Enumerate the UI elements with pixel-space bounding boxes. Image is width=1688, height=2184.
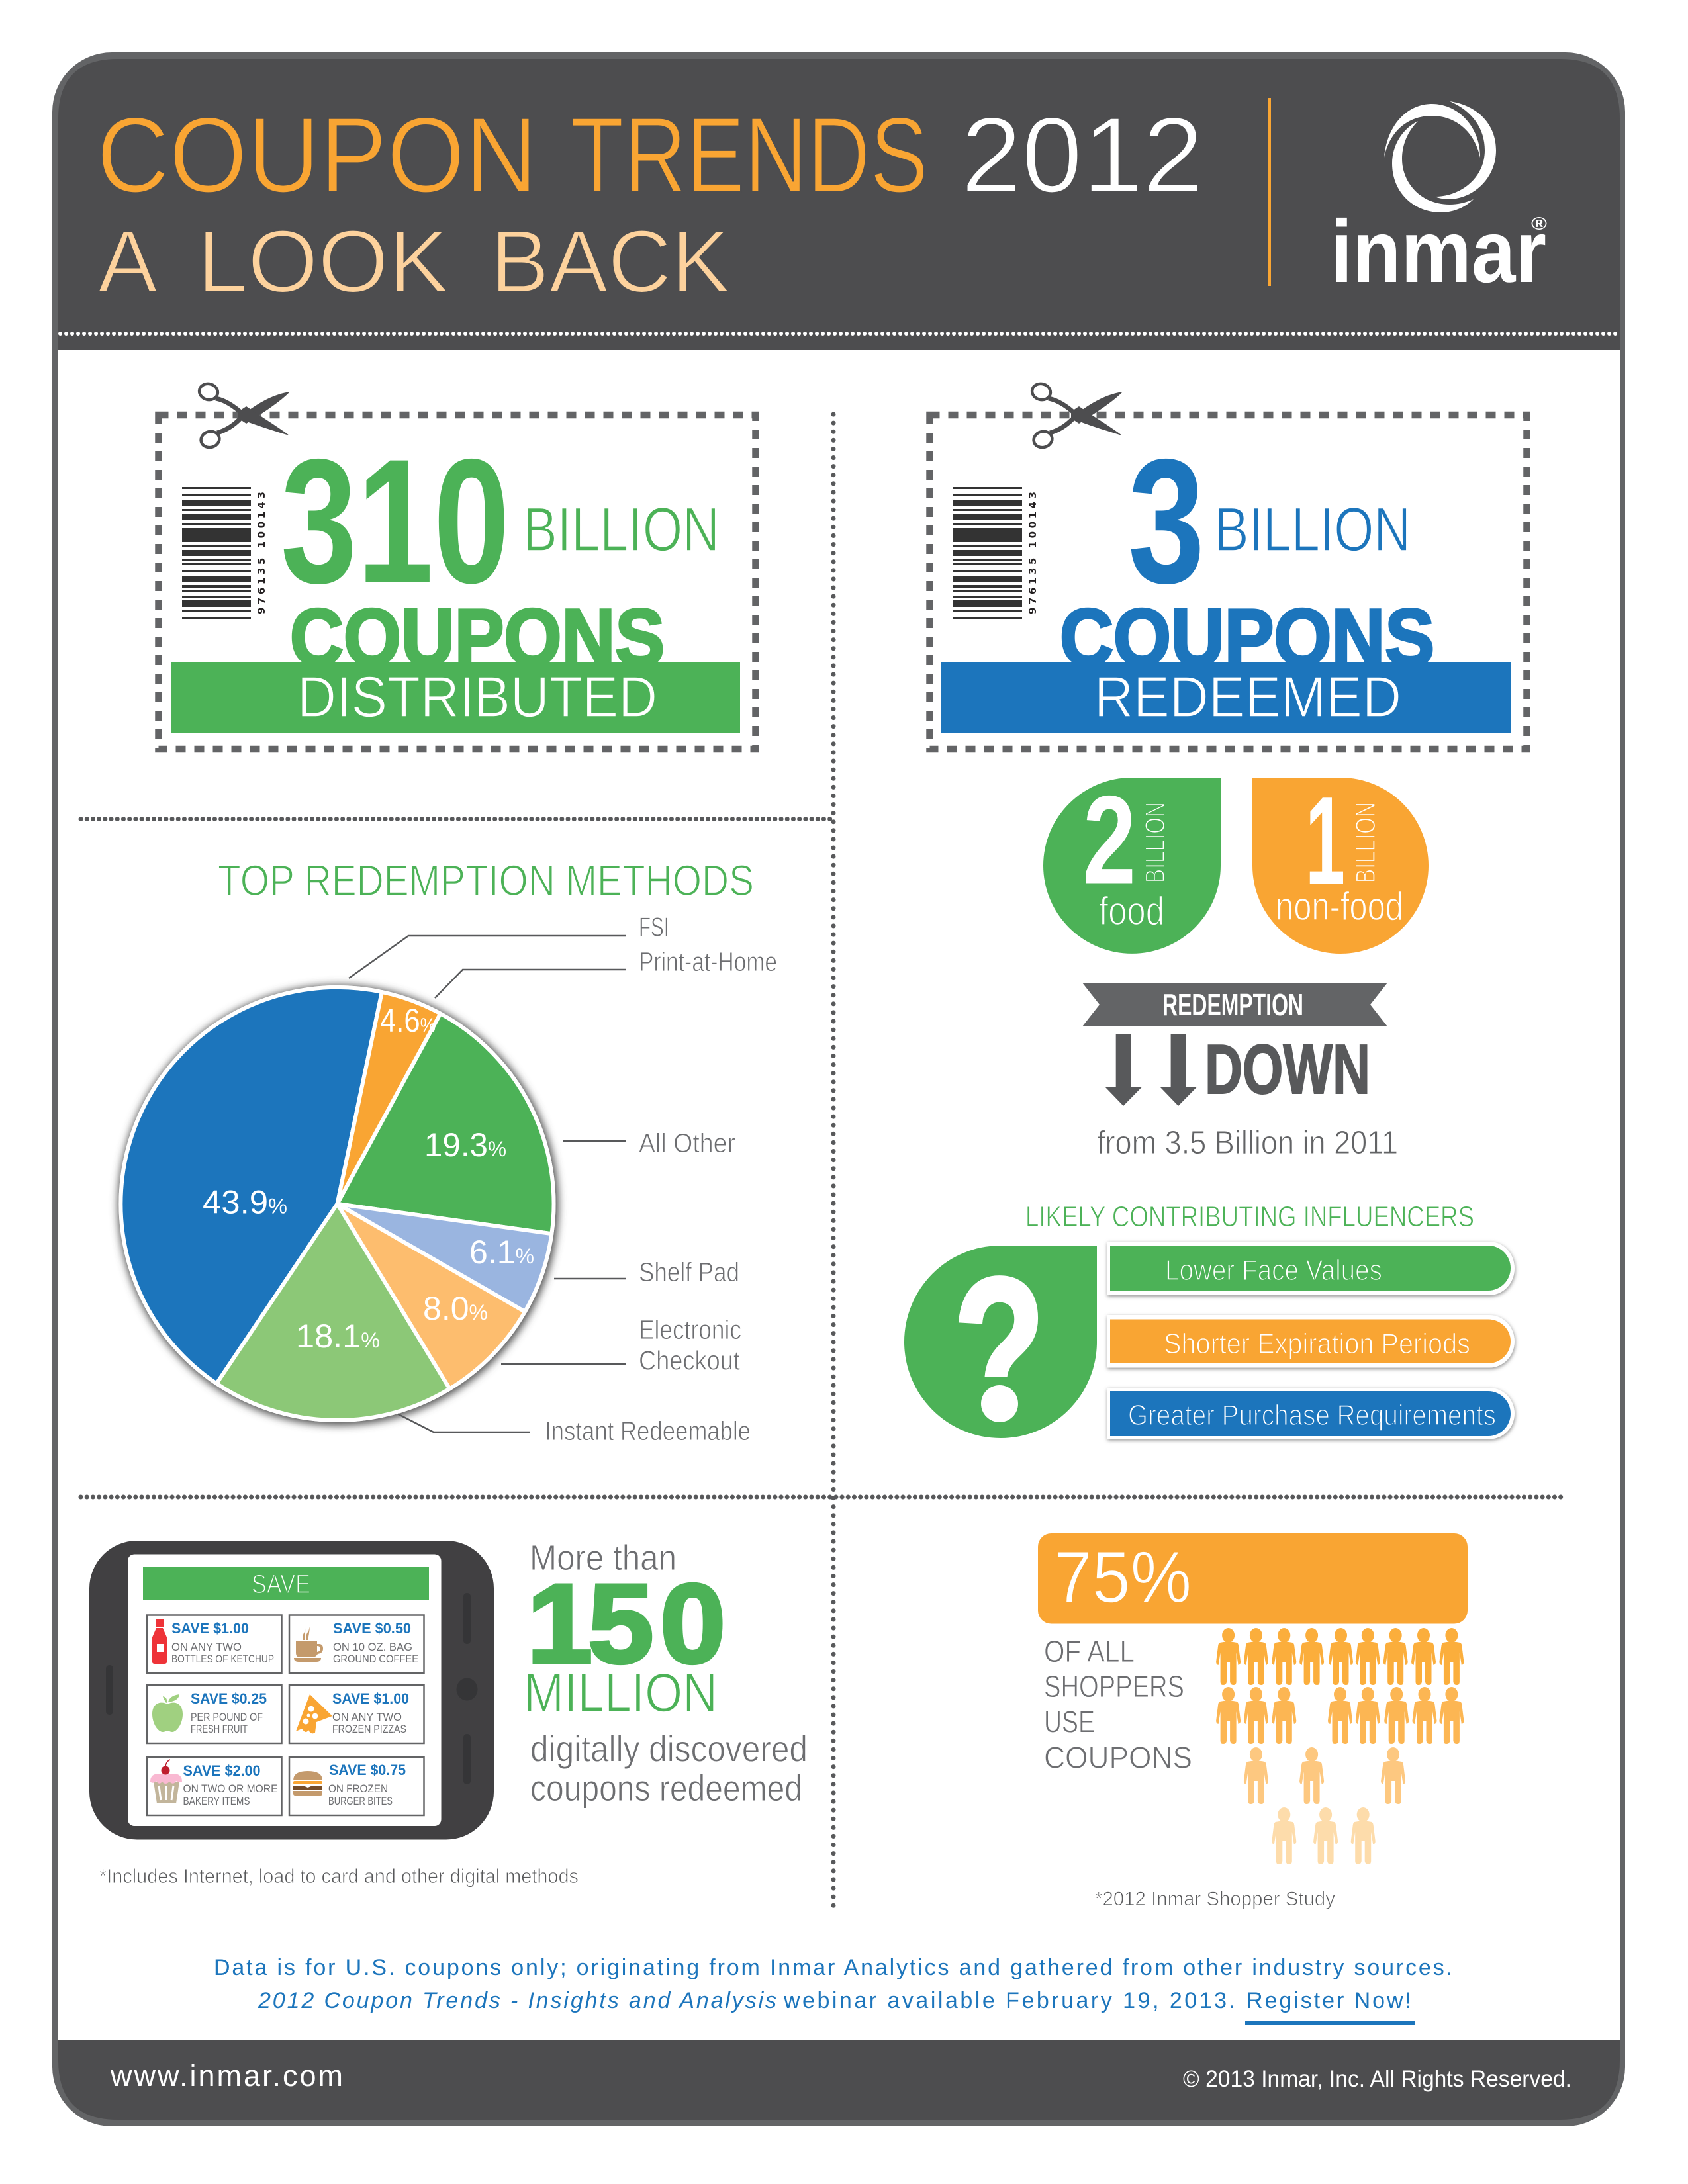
coupon: coffee: ON 10 OZ. BAG: [333, 1641, 412, 1653]
coupon: burger: ON FROZEN: [328, 1782, 388, 1795]
title line 1: 2012: [961, 95, 1203, 215]
redemption ribbon: [1082, 983, 1387, 1026]
icon: down arrow two: [1160, 1034, 1197, 1106]
coupon: coffee: SAVE $0.50: [333, 1620, 411, 1637]
title line 1: [97, 95, 1203, 215]
logo swirl: [1384, 101, 1496, 212]
register link: Register Now!: [1246, 1988, 1411, 2013]
blue band: [941, 662, 1511, 733]
coupon: ketchup: SAVE $1.00: [171, 1620, 249, 1637]
pie values: 43.9%: [203, 1183, 287, 1220]
phone: [89, 1541, 494, 1840]
coupon: cupcake: ON TWO OR MORE: [183, 1782, 278, 1795]
study note: *2012 Inmar Shopper Study: [1095, 1888, 1335, 1910]
title line 2: BACK: [491, 212, 730, 311]
coupon: burger: [289, 1757, 424, 1815]
pie values: 8.0%: [423, 1290, 488, 1327]
data source note: webinar available February 19, 2013.: [783, 1988, 1235, 2013]
badge: 1 billion non-food: [1252, 771, 1429, 954]
badge: 1 billion non-food: non-food: [1276, 884, 1403, 929]
slice: shelf pad 6.1%: [338, 1204, 551, 1312]
green band: [171, 662, 740, 733]
shoppers label: SHOPPERS: [1044, 1669, 1184, 1704]
digitally discovered text: [530, 1727, 808, 1809]
redemption ribbon: REDEMPTION: [1162, 987, 1303, 1022]
coupon: burger: SAVE $0.75: [329, 1762, 406, 1778]
barcode: 976135 100143: [1027, 492, 1039, 614]
barcode: [953, 487, 1039, 619]
registered mark: ®: [1531, 214, 1547, 234]
question badge: [904, 1246, 1097, 1438]
pill: shorter expiration periods: [1107, 1315, 1515, 1367]
people icons: [1216, 1628, 1464, 1864]
title line 2: LOOK: [197, 212, 449, 311]
digitally discovered text: digitally discovered: [530, 1727, 808, 1770]
coupon: pizza: ON ANY TWO: [332, 1711, 402, 1723]
more than: More than: [530, 1538, 677, 1578]
slice: instant redeemable 18.1%: [216, 1204, 449, 1420]
save bar: [143, 1567, 429, 1600]
chart labels: All Other: [639, 1128, 735, 1158]
slice: print-at-home 4.6%: [338, 992, 440, 1204]
coupon: burger: BURGER BITES: [328, 1795, 393, 1807]
icon: scissors: [1030, 382, 1123, 449]
panel: redemption breakdown: [1043, 770, 1429, 1161]
pie values: 18.1%: [296, 1318, 380, 1355]
title line 2: A: [98, 212, 158, 311]
pill: greater purchase requirements: Greater Purchase Requirements: [1128, 1399, 1496, 1432]
leader lines: [349, 936, 626, 1432]
coupon: coffee: [289, 1615, 424, 1673]
coupon: apple: SAVE $0.25: [191, 1690, 267, 1707]
icon: down arrow one: [1105, 1034, 1141, 1106]
header dotted rule: [60, 332, 1616, 336]
billion: BILLION: [523, 494, 720, 564]
chart labels: Checkout: [639, 1345, 741, 1375]
coupon: cupcake: BAKERY ITEMS: [183, 1795, 250, 1807]
copyright: © 2013 Inmar, Inc. All Rights Reserved.: [1183, 2066, 1571, 2092]
badge: 2 billion food: 2: [1083, 770, 1136, 911]
slice: electronic checkout 8.0%: [338, 1204, 525, 1388]
question badge: ?: [953, 1236, 1045, 1466]
slice: all other 19.3%: [338, 1014, 554, 1234]
coupon: cupcake: SAVE $2.00: [183, 1762, 261, 1779]
section dividers: [81, 414, 1566, 1907]
coupon: ketchup: [147, 1615, 282, 1673]
panel: coupons distributed: [159, 382, 756, 749]
footer: [110, 2059, 1571, 2093]
pie values: 19.3%: [424, 1126, 506, 1163]
data source note: 2012 Coupon Trends - Insights and Analysis: [258, 1988, 776, 2013]
title line 1: COUPON: [97, 95, 538, 215]
big number 3: 3: [1128, 422, 1205, 620]
badge: 2 billion food: BILLION: [1139, 802, 1170, 883]
logo wordmark: inmar: [1331, 203, 1546, 301]
chart labels: Instant Redeemable: [545, 1416, 751, 1446]
badge: 1 billion non-food: BILLION: [1350, 802, 1381, 883]
pill: shorter expiration periods: Shorter Expiration Periods: [1164, 1328, 1470, 1360]
heading: LIKELY CONTRIBUTING INFLUENCERS: [1025, 1201, 1474, 1233]
percent box: 75%: [1054, 1537, 1192, 1618]
panel: digital coupons: [89, 1538, 808, 1888]
phone screen: [128, 1554, 441, 1826]
big number 310: 310: [281, 422, 510, 620]
header: [97, 95, 1547, 311]
chart labels: FSI: [639, 912, 669, 942]
chart labels: [545, 912, 777, 1446]
pie values: 6.1%: [469, 1234, 534, 1271]
big number 150: 150: [527, 1561, 726, 1686]
coupon: pizza: [289, 1685, 424, 1743]
panel: shoppers using coupons: [1038, 1533, 1468, 1910]
pie values: 4.6%: [380, 1002, 436, 1039]
coupon: cupcake: [147, 1757, 282, 1815]
panel: top redemption methods: [118, 856, 777, 1446]
website: www.inmar.com: [110, 2059, 343, 2093]
coupon: pizza: FROZEN PIZZAS: [332, 1723, 406, 1735]
data source note: [214, 1955, 1452, 2025]
header divider: [1268, 98, 1271, 286]
phone side controls: [106, 1593, 478, 1784]
coupon: ketchup: BOTTLES OF KETCHUP: [171, 1653, 274, 1665]
coupon: apple: PER POUND OF: [191, 1711, 263, 1723]
chart labels: Print-at-Home: [639, 946, 777, 977]
slice: FSI 43.9%: [120, 987, 382, 1383]
shoppers label: [1044, 1634, 1192, 1775]
coupon: ketchup: ON ANY TWO: [171, 1641, 242, 1653]
register link: [1245, 1988, 1415, 2025]
badge: 1 billion non-food: 1: [1305, 771, 1345, 911]
save bar: SAVE: [252, 1570, 310, 1599]
barcode: [182, 487, 267, 619]
pill: lower face values: Lower Face Values: [1165, 1254, 1382, 1287]
coupons word: COUPONS: [1060, 592, 1434, 682]
inmar logo: [1331, 101, 1547, 301]
shoppers label: USE: [1044, 1705, 1095, 1739]
panel: coupons redeemed: [929, 382, 1526, 749]
barcode: 976135 100143: [256, 492, 267, 614]
title line 1: TRENDS: [571, 95, 928, 215]
chart labels: Electronic: [639, 1314, 741, 1345]
coupons word: COUPONS: [290, 592, 665, 682]
pie values: [203, 1002, 534, 1355]
badge: 2 billion food: food: [1099, 889, 1164, 933]
coupon: coffee: GROUND COFFEE: [333, 1653, 418, 1665]
shoppers label: COUPONS: [1044, 1741, 1192, 1775]
panel: likely contributing influencers: [904, 1206, 1518, 1443]
shoppers label: OF ALL: [1044, 1634, 1135, 1668]
distributed: DISTRIBUTED: [297, 665, 657, 729]
pie chart: [118, 985, 559, 1426]
footnote: *Includes Internet, load to card and other digital methods: [99, 1864, 579, 1888]
redeemed: REDEEMED: [1094, 665, 1401, 729]
data source note: Data is for U.S. coupons only; originating from Inmar Analytics and gathered from other industry sources.: [214, 1955, 1452, 1980]
million: MILLION: [524, 1662, 718, 1723]
chart labels: Shelf Pad: [639, 1257, 739, 1287]
coupon: pizza: SAVE $1.00: [332, 1690, 409, 1707]
comparison text: from 3.5 Billion in 2011: [1097, 1125, 1398, 1161]
pill: greater purchase requirements: [1107, 1388, 1515, 1439]
pill: lower face values: [1107, 1242, 1515, 1295]
chart title: TOP REDEMPTION METHODS: [218, 856, 754, 905]
coupon: apple: [147, 1685, 282, 1743]
title line 2: [98, 212, 730, 311]
percent box: [1038, 1533, 1468, 1624]
down label: DOWN: [1205, 1030, 1370, 1109]
billion: BILLION: [1215, 494, 1411, 564]
digitally discovered text: coupons redeemed: [530, 1767, 802, 1809]
icon: scissors: [197, 382, 290, 449]
coupon: apple: FRESH FRUIT: [191, 1723, 248, 1735]
badge: 2 billion food: [1043, 770, 1221, 954]
